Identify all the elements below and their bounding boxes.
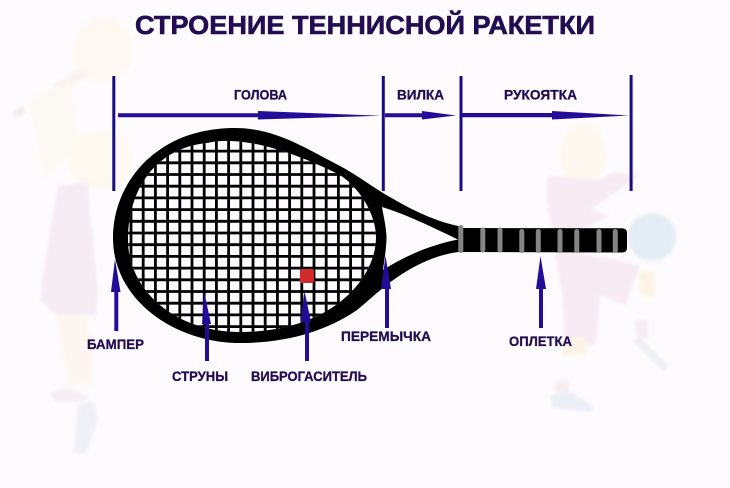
label: голова: ГОЛОВА <box>234 86 287 102</box>
label: бампер: БАМПЕР <box>87 336 144 352</box>
label: вилка: ВИЛКА <box>397 86 444 102</box>
racket strings <box>128 140 376 332</box>
racket <box>113 128 627 343</box>
background figure: right player <box>547 123 676 412</box>
arrow: виброгаситель <box>300 291 311 361</box>
arrow: перемычка <box>381 256 391 328</box>
racket frame: head, fork and handle <box>113 128 627 343</box>
arrow: оплетка <box>536 256 546 328</box>
arrow: вилка <box>385 111 456 120</box>
label: струны: СТРУНЫ <box>172 368 228 384</box>
arrow: рукоятка <box>462 111 629 120</box>
arrow: струны <box>202 291 211 361</box>
arrow: голова <box>118 111 381 120</box>
arrow: бампер <box>111 259 120 331</box>
handle grip bands <box>458 225 618 253</box>
label: рукоятка: РУКОЯТКА <box>504 86 577 102</box>
label: виброгаситель: ВИБРОГАСИТЕЛЬ <box>251 368 367 384</box>
title: СТРОЕНИЕ ТЕННИСНОЙ РАКЕТКИ <box>135 10 595 40</box>
section markers: vertical dividers <box>112 75 633 191</box>
vibration dampener <box>300 269 314 283</box>
label: перемычка: ПЕРЕМЫЧКА <box>341 328 431 344</box>
background figure: left player <box>12 16 133 453</box>
label: оплетка: ОПЛЕТКА <box>509 333 572 349</box>
